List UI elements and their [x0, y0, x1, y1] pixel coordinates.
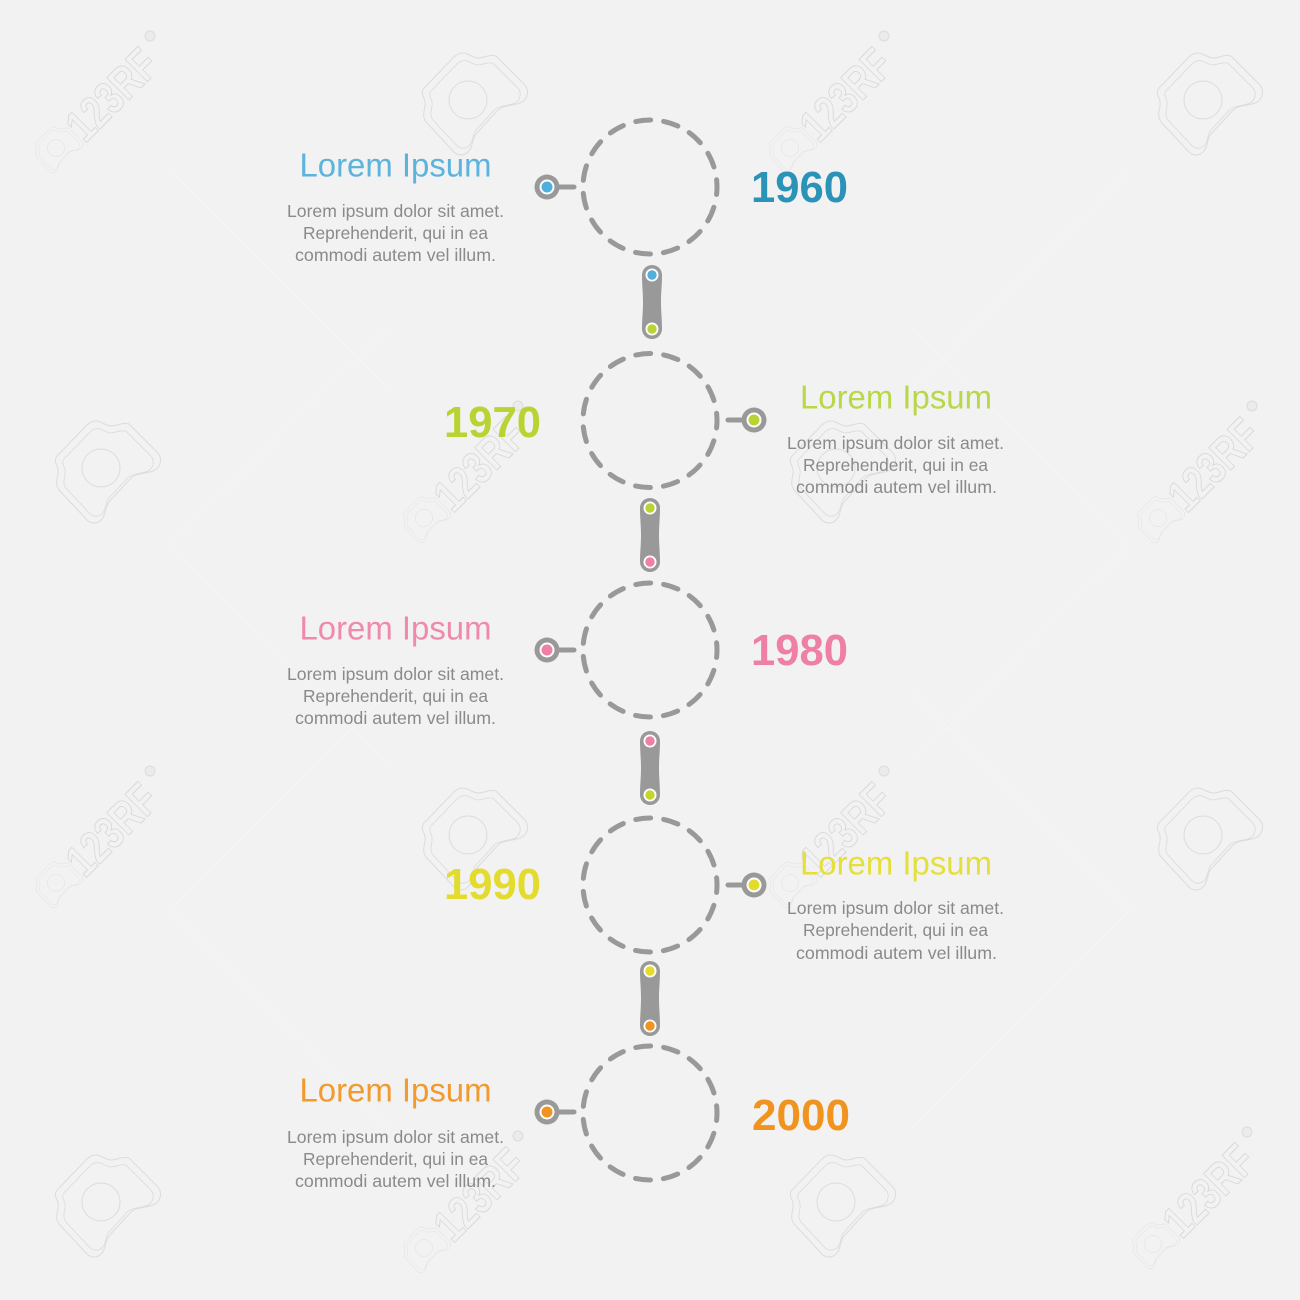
- pin marker: [534, 1100, 574, 1124]
- heading: Lorem Ipsum: [300, 1072, 492, 1108]
- description: commodi autem vel illum.: [295, 1171, 496, 1191]
- description: [787, 898, 1004, 963]
- description: Lorem ipsum dolor sit amet.: [287, 201, 504, 221]
- description: commodi autem vel illum.: [295, 245, 496, 265]
- watermark stamps: 123RF: [55, 38, 168, 151]
- year: 1970: [444, 398, 541, 447]
- watermark stamps: 123RF: [789, 773, 902, 886]
- description: Lorem ipsum dolor sit amet.: [787, 433, 1004, 453]
- description: Reprehenderit, qui in ea: [303, 686, 488, 706]
- heading: Lorem Ipsum: [300, 610, 492, 646]
- description: commodi autem vel illum.: [295, 708, 496, 728]
- watermark stamps: 123RF: [1157, 408, 1270, 521]
- description: commodi autem vel illum.: [796, 477, 997, 497]
- description: [787, 433, 1004, 497]
- watermark stamps: 123RF: [1152, 1134, 1265, 1247]
- year: 1980: [751, 626, 848, 675]
- dashed circle: [583, 818, 717, 952]
- description: [287, 1127, 504, 1191]
- description: Lorem ipsum dolor sit amet.: [287, 664, 504, 684]
- dashed circle: [583, 354, 717, 488]
- heading: Lorem Ipsum: [800, 378, 992, 416]
- description: commodi autem vel illum.: [796, 943, 997, 963]
- watermark stamps: 123RF: [423, 408, 536, 521]
- pin marker: [728, 408, 766, 432]
- step 2000: [287, 1046, 850, 1191]
- description: Reprehenderit, qui in ea: [803, 455, 988, 475]
- step 1970: [444, 354, 1004, 497]
- heading: Lorem Ipsum: [800, 844, 992, 882]
- step 1960: [287, 120, 848, 265]
- step 1980: [287, 583, 848, 728]
- connector 1970 to 1980: [640, 498, 660, 572]
- dashed circle: [583, 1046, 717, 1180]
- faint background diagonals: [170, 170, 1130, 1130]
- connector 1960 to 1970: [642, 265, 662, 339]
- heading: Lorem Ipsum: [300, 146, 492, 184]
- watermark stamps: 123RF: [423, 1138, 536, 1251]
- connector 1990 to 2000: [640, 961, 660, 1036]
- description: [287, 201, 504, 265]
- step 1990: [444, 818, 1004, 963]
- description: Reprehenderit, qui in ea: [803, 920, 988, 940]
- watermark stamps: 123RF: [789, 38, 902, 151]
- description: [287, 664, 504, 728]
- year: 2000: [752, 1091, 850, 1140]
- description: Reprehenderit, qui in ea: [303, 223, 488, 243]
- connector 1980 to 1990: [640, 731, 660, 805]
- dashed circle: [583, 120, 717, 254]
- pin marker: [728, 872, 766, 898]
- description: Lorem ipsum dolor sit amet.: [787, 898, 1004, 918]
- pin marker: [534, 174, 574, 200]
- year: 1990: [444, 860, 541, 909]
- dashed circle: [583, 583, 717, 717]
- description: Lorem ipsum dolor sit amet.: [287, 1127, 504, 1147]
- description: Reprehenderit, qui in ea: [303, 1149, 488, 1169]
- pin marker: [534, 638, 574, 662]
- year: 1960: [751, 163, 848, 212]
- watermark stamps: 123RF: [55, 773, 168, 886]
